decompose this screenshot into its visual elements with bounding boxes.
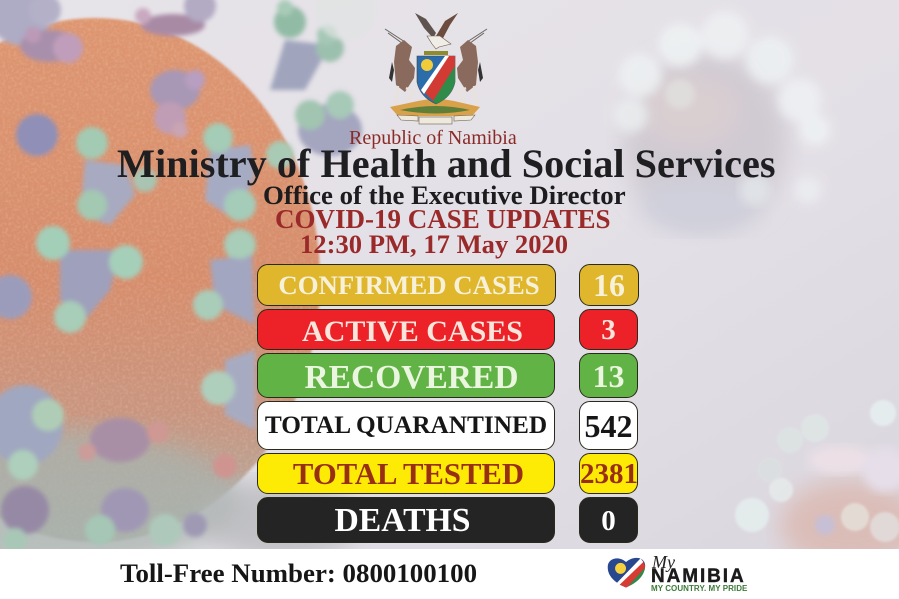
logo text: NAMIBIA: NAMIBIA [651,566,746,587]
value: confirmed cases: 16 [593,267,625,303]
row: recovered [257,353,555,398]
value: total tested: 2381 [580,458,638,490]
heading: date and time: 12:30 PM, 17 May 2020 [300,229,568,259]
heading: Ministry of Health and Social Services: Ministry of Health and Social Services [117,141,776,186]
value: confirmed cases [579,264,639,306]
spike: middle [205,145,255,220]
row: total tested [257,453,555,494]
blurred sphere bottom right [735,400,899,570]
row: total tested: TOTAL TESTED [293,457,524,491]
heading: Office of the Executive Director: Office of the Executive Director [263,180,626,210]
spike: lower left [0,385,63,465]
row: total quarantined [257,401,555,450]
row: confirmed cases [257,264,556,306]
spike: left centre [80,160,135,225]
row: confirmed cases: CONFIRMED CASES [278,270,540,300]
shield [417,51,455,104]
orange sphere with spikes [0,0,375,570]
row: deaths: DEATHS [334,502,471,539]
central upper spike [150,70,200,110]
value: total quarantined: 542 [584,408,632,444]
logo text: My: My [652,552,675,572]
right spike behind heading [298,104,362,156]
base and motto [390,98,480,124]
row: active cases: ACTIVE CASES [302,315,523,348]
text: toll-free number: Toll-Free Number: 0800100100 [120,558,477,588]
upper-right spike [270,40,330,90]
icon: coat of arms [384,13,488,124]
value: total quarantined [579,401,638,450]
blurred sphere top right [612,11,831,233]
heading: Republic of Namibia: Republic of Namibia [349,127,517,149]
right oryx [457,29,487,107]
row: active cases [257,309,555,350]
value: active cases [579,309,638,350]
value: recovered [579,353,638,398]
value: deaths: 0 [601,505,616,537]
spike: right of centre [210,255,255,325]
footer band [0,549,899,599]
row: recovered: RECOVERED [304,359,519,396]
left oryx [385,29,415,107]
top spikes [141,14,205,36]
icon: My Namibia logo [608,552,748,593]
eagle [415,13,458,49]
value: deaths [579,497,638,543]
top-left spike [0,0,50,45]
spike: lower-left group [60,250,120,320]
logo text: tagline: MY COUNTRY. MY PRIDE [651,584,747,593]
heading: COVID-19 CASE UPDATES: COVID-19 CASE UPDATES [275,204,611,234]
value: active cases: 3 [601,314,616,346]
row: total quarantined: TOTAL QUARANTINED [265,411,547,439]
row: deaths [257,497,555,543]
icon: heart flag [608,558,646,588]
purple round spike [16,114,58,156]
value: recovered: 13 [592,358,624,394]
